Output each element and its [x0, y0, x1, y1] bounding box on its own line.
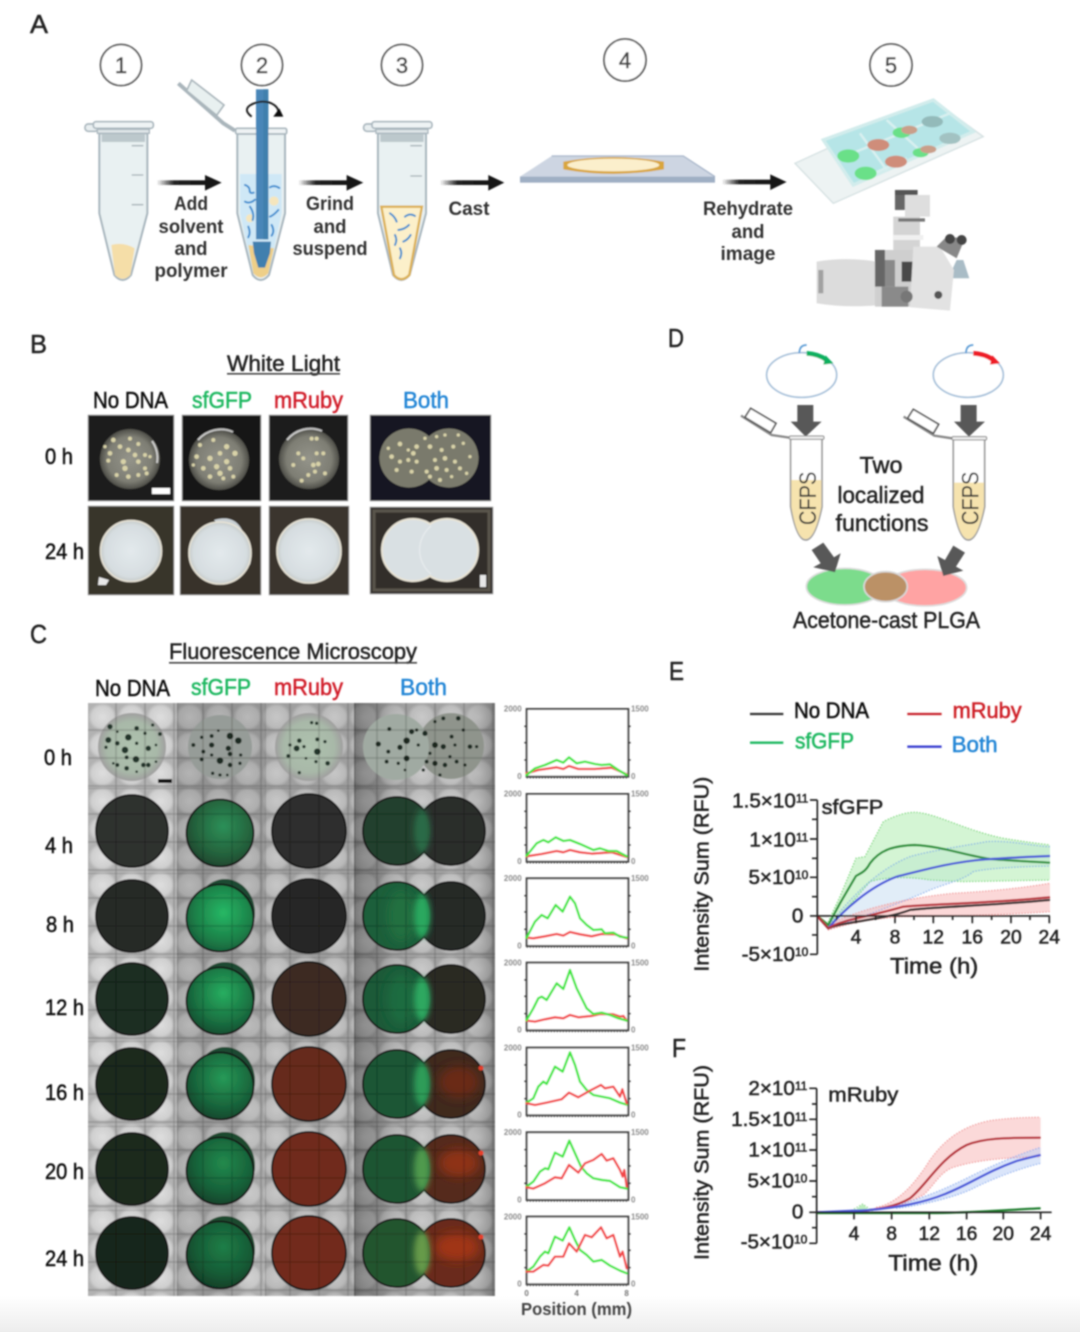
label: add solvent and polymer: solvent [158, 216, 224, 238]
line profile 24 h: 0 [631, 1280, 636, 1289]
micrographs: 12 h [96, 962, 485, 1036]
line chart: mRuby intensity [691, 1065, 1052, 1276]
line chart: sfGFP intensity: 16 [962, 927, 983, 948]
line profile 0 h: 2000 [504, 705, 522, 714]
icon: CFPS tube left: CFPS [795, 472, 822, 525]
column label: sfGFP: sfGFP [192, 387, 252, 413]
line profile 12 h: 0 [517, 1026, 522, 1035]
line chart: mRuby intensity: 8 [886, 1224, 897, 1245]
row label: 4 h: 4 h [45, 833, 73, 858]
line chart: mRuby intensity: Intensity Sum (RFU) [691, 1065, 713, 1260]
label: rehydrate and image: image [720, 243, 776, 265]
line chart: mRuby intensity: 20 [993, 1224, 1014, 1245]
panel letter B: B [30, 329, 47, 359]
line chart: sfGFP intensity: 20 [1000, 927, 1022, 948]
micrograph grid [88, 703, 495, 1296]
panel: D localized functions schematic [668, 323, 1003, 633]
line profile 24 h: 4 [574, 1289, 579, 1298]
photo: mRuby 0 h [269, 415, 348, 501]
icon: tube with suspension [364, 122, 432, 280]
photo: sfGFP 0 h [182, 415, 261, 501]
panel letter D: D [668, 323, 684, 353]
line profile 0 h: 0 [517, 772, 522, 781]
legend [750, 698, 1022, 757]
line profile 16 h: 0 [517, 1111, 522, 1120]
row label: 16 h: 16 h [45, 1080, 84, 1105]
line profile 16 h: 2000 [504, 1043, 522, 1052]
line profile 24 h: 2000 [504, 1212, 522, 1221]
line profile 12 h [504, 958, 649, 1035]
photo: No DNA 0 h [88, 415, 174, 501]
label: add solvent and polymer: polymer [154, 260, 228, 282]
panel: E sfGFP time course [669, 656, 1060, 978]
line chart: mRuby intensity: 11 [795, 1110, 808, 1124]
row label: 0 h: 0 h [44, 745, 72, 770]
line chart: sfGFP intensity: Time (h) [890, 953, 978, 978]
micrographs: 4 h [96, 794, 485, 868]
arrow: plasmid to tube right [954, 405, 985, 437]
step number 2 [242, 44, 282, 86]
arrow: step 3 to 4 [440, 175, 504, 191]
bottom shading [0, 1296, 1080, 1332]
arrow: plasmid to tube left [791, 405, 822, 437]
line profile 0 h: 0 [631, 772, 636, 781]
line profile 24 h: 0 [517, 1280, 522, 1289]
row label: 24 h: 24 h [45, 539, 84, 564]
line profile 12 h: 1500 [631, 958, 649, 967]
text: two localized functions: localized [838, 482, 924, 508]
icon: microscope [817, 190, 969, 311]
text: two localized functions: Two [860, 452, 902, 478]
label: add solvent and polymer: and [174, 238, 208, 260]
line chart: sfGFP intensity: sfGFP [822, 796, 883, 819]
line chart: sfGFP intensity: -5×10 [742, 943, 795, 966]
line chart: sfGFP intensity: 10 [795, 868, 809, 882]
photo: mRuby 24 h [269, 506, 349, 595]
line chart: mRuby intensity: 10 [794, 1171, 808, 1185]
line profile 20 h: 0 [631, 1195, 636, 1204]
arrow: step 1 to 2 [157, 175, 222, 191]
line profile 16 h: 0 [631, 1111, 636, 1120]
line profile 4 h: 0 [631, 857, 636, 866]
line profile 4 h: 2000 [504, 790, 522, 799]
line chart: sfGFP intensity: Intensity Sum (RFU) [691, 777, 713, 972]
text: two localized functions: functions [836, 510, 928, 536]
micrographs: 8 h [96, 879, 485, 953]
line profile 4 h: 0 [517, 857, 522, 866]
line profile 8 h [504, 874, 649, 950]
label: grind and suspend: suspend [292, 238, 368, 260]
row label: 0 h: 0 h [45, 444, 73, 469]
line profile 20 h: 0 [517, 1195, 522, 1204]
line profile 24 h: 0 [524, 1289, 529, 1298]
stitching grid overlay [88, 703, 495, 1296]
row label: 8 h: 8 h [46, 912, 74, 937]
step number 5 [870, 44, 912, 86]
line profile 20 h [504, 1128, 649, 1204]
step number 4: 4 [619, 48, 631, 73]
line chart: sfGFP intensity: 4 [851, 927, 862, 948]
photo: sfGFP 24 h [180, 506, 261, 595]
legend: mRuby [953, 698, 1022, 723]
micrographs: 16 h [96, 1047, 485, 1121]
legend: sfGFP [795, 728, 854, 753]
column label: No DNA: No DNA [95, 675, 171, 701]
column label: mRuby: mRuby [274, 674, 343, 700]
panel: C fluorescence microscopy [30, 619, 649, 1319]
panel: F mRuby time course [672, 1033, 1052, 1276]
micrographs: 20 h [96, 1132, 485, 1206]
line profile 12 h: 0 [631, 1026, 636, 1035]
line profile 4 h: 1500 [631, 790, 649, 799]
step number 4 [604, 39, 646, 81]
panel: B white light [30, 329, 493, 595]
step number 3 [382, 44, 422, 86]
step number 1: 1 [115, 53, 127, 78]
line profile 0 h: 1500 [631, 705, 649, 714]
label: grind and suspend: and [314, 216, 346, 238]
panel letter F: F [672, 1033, 686, 1063]
label: grind and suspend [292, 193, 368, 260]
arrow: step 4 to 5 [722, 174, 787, 190]
line chart: mRuby intensity: 10 [794, 1232, 808, 1246]
line profile 24 h: 1500 [631, 1212, 649, 1221]
label: rehydrate and image: Rehydrate [703, 198, 793, 220]
column label: Both: Both [403, 387, 449, 413]
line chart: mRuby intensity: mRuby [828, 1084, 899, 1107]
text: two localized functions [836, 452, 928, 536]
photo: No DNA 24 h [88, 506, 174, 595]
line chart: sfGFP intensity: 5×10 [748, 866, 795, 889]
line chart: mRuby intensity: 4 [849, 1224, 860, 1245]
photo: Both 0 h [370, 415, 491, 501]
line profile 12 h: 2000 [504, 958, 522, 967]
line chart: mRuby intensity: 16 [956, 1224, 977, 1245]
arrow: step 2 to 3 [298, 175, 363, 191]
line chart: sfGFP intensity: 0 [792, 904, 803, 927]
line chart: sfGFP intensity: 11 [796, 831, 809, 845]
legend: Both [952, 732, 998, 757]
row label: 12 h: 12 h [45, 995, 84, 1020]
icon: CFPS tube left [741, 408, 824, 540]
icon: CFPS tube right: CFPS [958, 472, 985, 525]
axis label: position: Position (mm) [521, 1299, 632, 1319]
step number 1 [100, 44, 142, 86]
micrographs: 24 h [96, 1216, 485, 1290]
line profile 24 h: 8 [624, 1289, 629, 1298]
line chart: sfGFP intensity: 12 [923, 927, 944, 948]
column label: mRuby: mRuby [274, 387, 343, 413]
line profile 8 h: 2000 [504, 874, 522, 883]
label: rehydrate and image: and [732, 221, 764, 243]
line profile 4 h [504, 790, 649, 866]
step number 5: 5 [885, 53, 897, 78]
icon: chamber slide with samples [795, 100, 983, 203]
icon: CFPS tube right [904, 409, 987, 540]
line chart: mRuby intensity: 12 [919, 1224, 940, 1245]
icon: slide with cast disc [520, 156, 715, 183]
line chart: mRuby intensity: 11 [795, 1079, 808, 1093]
panel letter E: E [669, 656, 684, 686]
line profile 24 h [504, 1212, 649, 1298]
icon: mRuby plasmid [933, 345, 1003, 397]
legend: No DNA [794, 698, 869, 723]
line chart: sfGFP intensity: 10 [795, 945, 809, 959]
line chart: mRuby intensity: 0 [792, 1200, 803, 1223]
line profile 20 h: 2000 [504, 1128, 522, 1137]
line profile 8 h: 0 [517, 941, 522, 950]
diagram: overlapping PLGA discs [806, 568, 967, 606]
heading: white light: White Light [227, 351, 341, 376]
line chart: mRuby intensity: 2×10 [748, 1077, 795, 1100]
photo: Both 24 h [370, 507, 493, 594]
scale bar [158, 779, 172, 783]
step number 2: 2 [256, 53, 268, 78]
line chart: mRuby intensity: 11 [795, 1141, 808, 1155]
line chart: sfGFP intensity: 8 [890, 927, 900, 948]
line profile 16 h: 1500 [631, 1043, 649, 1052]
line chart: mRuby intensity: Time (h) [888, 1251, 978, 1276]
icon: sfGFP plasmid [767, 345, 837, 397]
scale bar [152, 488, 170, 494]
label: add solvent and polymer: Add [174, 193, 208, 215]
arrow: tube right to disc [937, 546, 965, 576]
micrographs: 0 h [98, 713, 484, 783]
panel: A workflow [30, 9, 983, 311]
heading: fluorescence microscopy: Fluorescence Microscopy [169, 639, 418, 664]
arrow: tube left to disc [812, 543, 841, 572]
line chart: sfGFP intensity: 1×10 [749, 829, 796, 852]
line profile 16 h [504, 1043, 649, 1120]
row label: 20 h: 20 h [45, 1159, 84, 1184]
panel letter A: A [30, 9, 49, 39]
line profile 0 h [504, 705, 649, 781]
row label: 24 h: 24 h [45, 1246, 84, 1271]
column label: sfGFP: sfGFP [191, 674, 251, 700]
line chart: sfGFP intensity: 24 [1039, 927, 1060, 948]
label: acetone-cast PLGA: Acetone-cast PLGA [793, 607, 981, 633]
line chart: sfGFP intensity [691, 777, 1060, 978]
line chart: sfGFP intensity: 1.5×10 [732, 789, 796, 812]
line profile 20 h: 1500 [631, 1128, 649, 1137]
line chart: sfGFP intensity: 11 [796, 791, 809, 805]
icon: tube with powder [85, 122, 153, 280]
step number 3: 3 [396, 53, 408, 78]
line chart: mRuby intensity: 24 [1030, 1224, 1052, 1245]
column label: Both: Both [400, 674, 447, 700]
panel letter C: C [30, 619, 47, 649]
icon: tube with pestle [178, 80, 287, 280]
line chart: mRuby intensity: -5×10 [741, 1230, 794, 1253]
column label: No DNA: No DNA [93, 387, 169, 413]
line chart: mRuby intensity: 1.5×10 [731, 1108, 795, 1131]
label: cast: Cast [448, 198, 490, 220]
label: rehydrate and image [703, 198, 793, 265]
label: grind and suspend: Grind [306, 193, 354, 215]
label: add solvent and polymer [154, 193, 228, 282]
line chart: mRuby intensity: 5×10 [747, 1169, 794, 1192]
line profile 8 h: 0 [631, 941, 636, 950]
line chart: mRuby intensity: 1×10 [748, 1139, 795, 1162]
line profile 8 h: 1500 [631, 874, 649, 883]
